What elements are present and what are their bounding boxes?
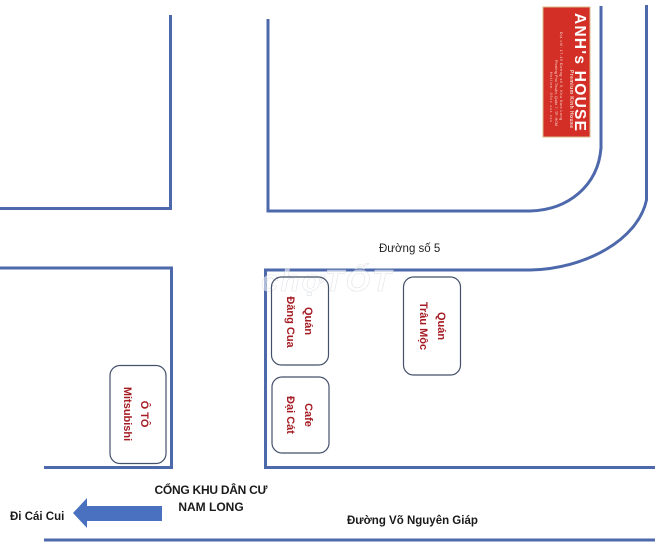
- shop: Quán Đăng Cua: [272, 277, 328, 365]
- road outline: top-left block: [0, 15, 170, 208]
- road label: Đường Võ Nguyên Giáp: Đường Võ Nguyên Giáp: [347, 515, 478, 527]
- shop: Quán Trâu Mộc: [404, 277, 460, 375]
- road outline: lower-left block: [0, 268, 172, 468]
- banner address line 3: Hotline: 09xx xxx xxx: [549, 72, 553, 122]
- banner address line 2: Phường Phú Thuận, Quận 7, TP. HCM: [554, 60, 558, 126]
- road label: Đường số 5: Đường số 5: [379, 243, 440, 255]
- shop: Ô TÔ Mitsubishi: [110, 366, 166, 464]
- shop: Quán Đăng Cua: Quán: [302, 307, 314, 335]
- shop: Cafe Đại Cát: Đại Cát: [284, 396, 296, 434]
- banner: ANH's HOUSE: [543, 7, 590, 137]
- shop: Ô TÔ Mitsubishi: Ô TÔ: [138, 401, 151, 428]
- shop: Cafe Đại Cát: [272, 377, 329, 453]
- shop: Quán Trâu Mộc: Quán: [435, 312, 447, 340]
- gate label: NAM LONG: [178, 500, 244, 514]
- road outline: top-right inner curve: [268, 6, 601, 211]
- label: Đi Cái Cui: Đi Cái Cui: [10, 511, 64, 523]
- banner title: ANH's HOUSE: [571, 13, 588, 131]
- road outline: Đường số 5 outer curve: [266, 5, 655, 468]
- shop: Ô TÔ Mitsubishi: Mitsubishi: [121, 387, 133, 441]
- shop: Cafe Đại Cát: Cafe: [302, 403, 314, 427]
- arrow: towards Cái Cui: [73, 498, 162, 528]
- watermark: chợ TỐT: chợTỐT: [261, 262, 394, 298]
- shop: Quán Đăng Cua: Đăng Cua: [284, 296, 296, 349]
- road outline: bottom road: [44, 538, 655, 542]
- gate label: [154, 482, 268, 514]
- banner address line 1: Địa chỉ: 17-19 Đường số 5, Khu Nam Long: [559, 32, 563, 120]
- shop: Quán Trâu Mộc: Trâu Mộc: [417, 302, 429, 350]
- gate label: CỔNG KHU DÂN CƯ: [154, 482, 268, 497]
- banner subtitle: Premium Kinh House: [568, 70, 574, 128]
